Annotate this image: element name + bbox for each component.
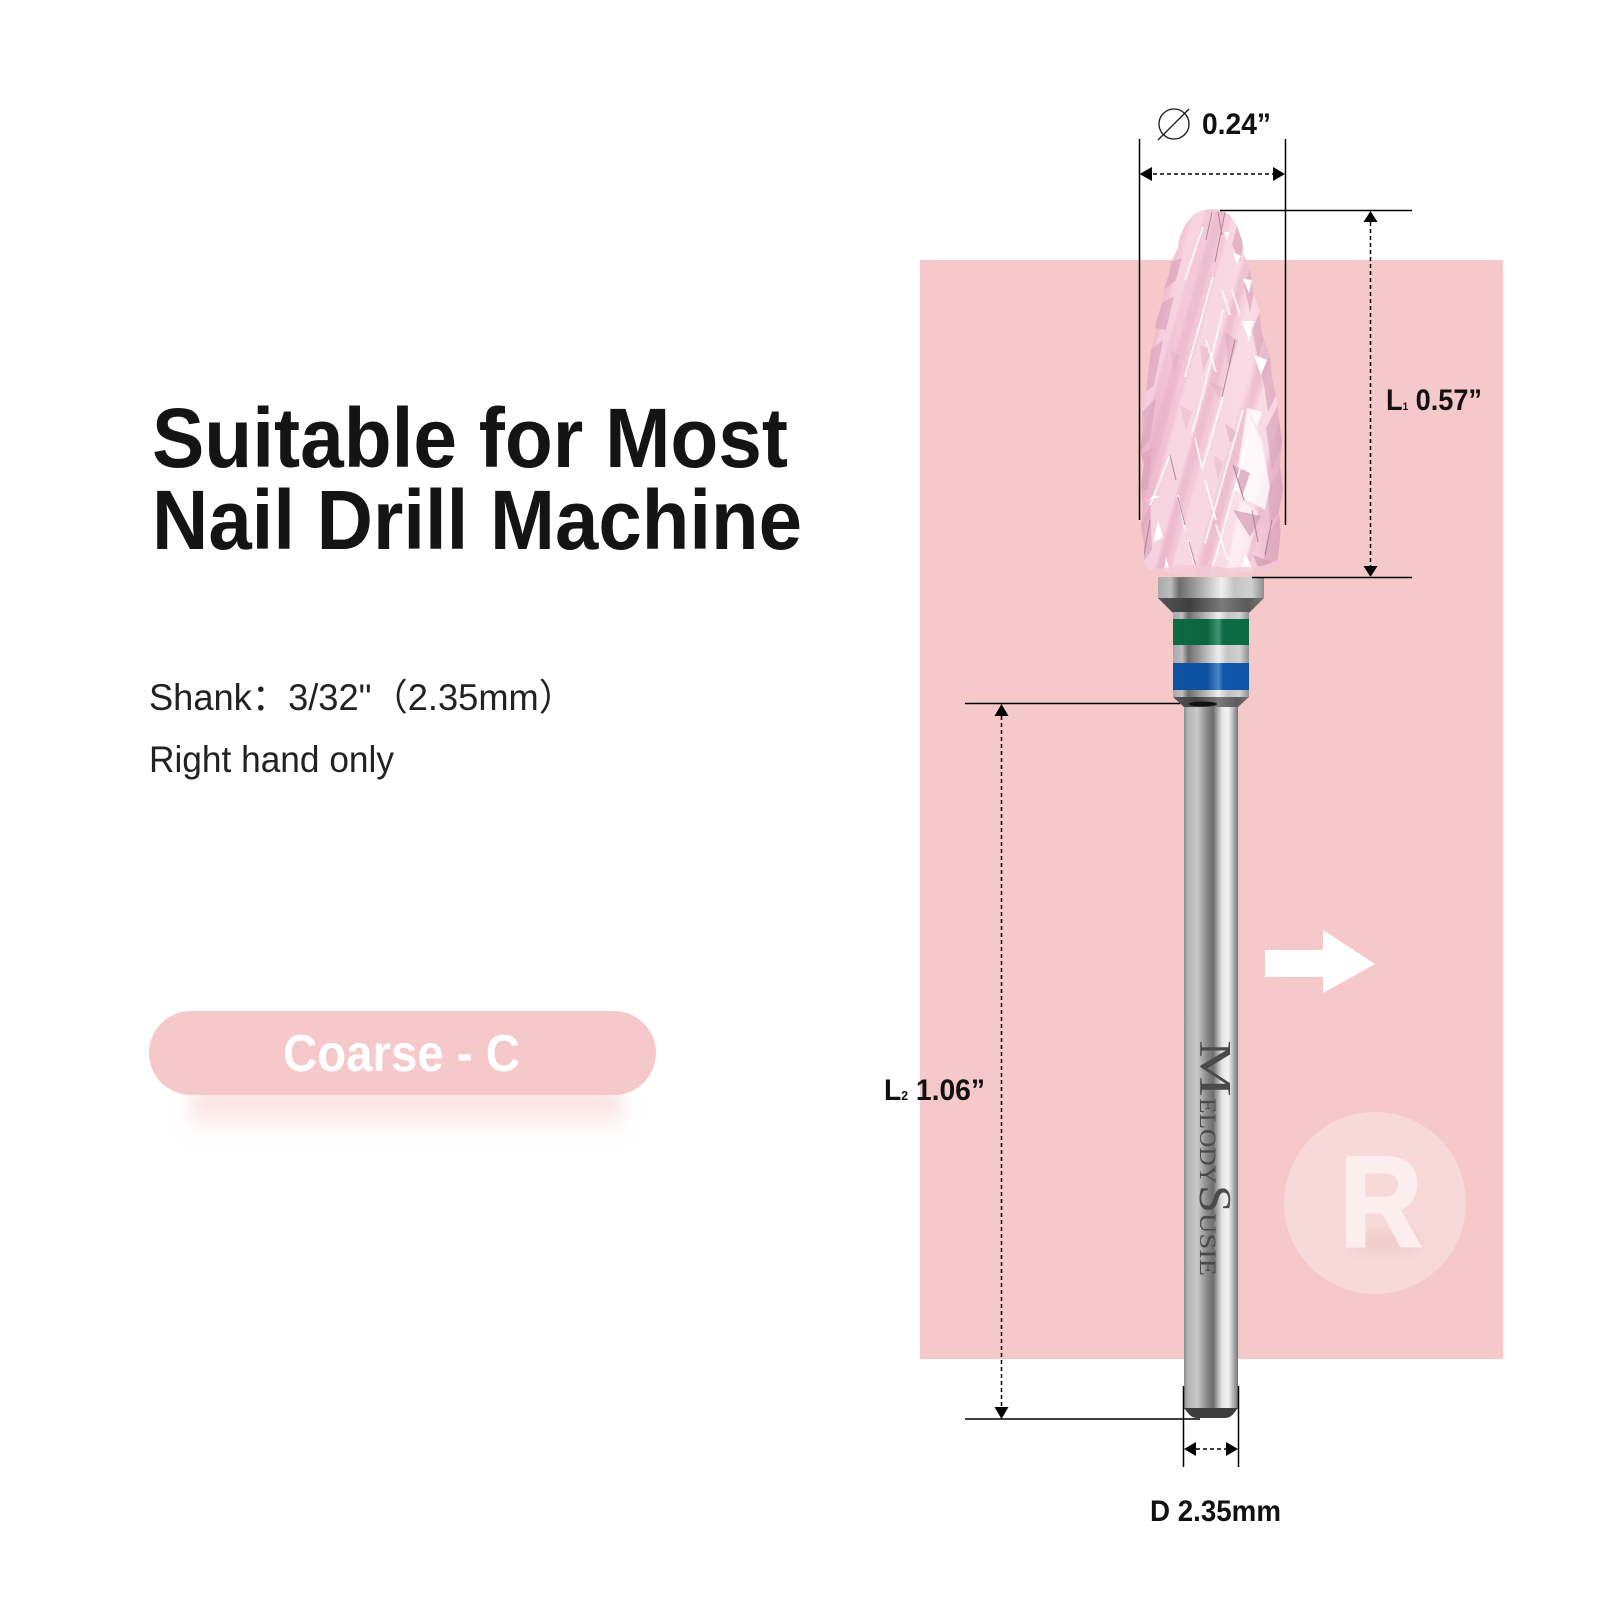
dimension: head length L1 0.57 inch: L1 0.57” [1386, 384, 1482, 417]
drill bit [1140, 209, 1283, 1418]
metal shank [1184, 707, 1238, 1409]
green ring [1173, 619, 1249, 645]
dimension: shank diameter D 2.35mm [1150, 1386, 1281, 1528]
engraved MelodySusie logo: S [1190, 1185, 1240, 1213]
dimension: head diameter 0.24 inch [1140, 108, 1286, 525]
shank tip [1184, 1408, 1238, 1418]
shaded facets [1170, 333, 1274, 567]
specification text [149, 677, 575, 780]
engraved MelodySusie logo: M [1190, 1040, 1240, 1097]
engraved MelodySusie logo [1190, 1040, 1240, 1276]
engraved MelodySusie logo: USIE [1195, 1213, 1220, 1276]
pink panel [920, 260, 1503, 1359]
lower collar [1173, 690, 1249, 707]
specification text: Shank：3/32"（2.35mm） [149, 677, 575, 718]
title: Nail Drill Machine [152, 473, 802, 567]
metal collar [1158, 577, 1264, 619]
dimension: head length L1 0.57 inch [1220, 210, 1482, 578]
title [152, 391, 802, 567]
right-hand R badge [1284, 1112, 1466, 1294]
dimension: shank length L2 1.06 inch: L2 1.06” [884, 1074, 985, 1107]
blue ring [1173, 663, 1249, 690]
icon: diameter symbol [1158, 109, 1189, 140]
dimension: shank diameter D 2.35mm: D 2.35mm [1150, 1495, 1281, 1528]
specification text: Right hand only [149, 739, 394, 780]
right-hand R badge: R [1340, 1131, 1422, 1274]
title: Suitable for Most [152, 391, 788, 485]
scalloped edge facets [1140, 226, 1284, 568]
white chip triangles [1146, 232, 1267, 572]
dark flute lines [1144, 212, 1272, 570]
ceramic pink bur head [1140, 209, 1283, 576]
coarse grade pill [149, 1011, 656, 1136]
silver spacer [1173, 645, 1249, 663]
engraved MelodySusie logo: ELODY [1195, 1098, 1220, 1184]
white flute lines [1150, 227, 1248, 570]
direction arrow [1265, 930, 1375, 993]
dimension: head diameter 0.24 inch: 0.24” [1202, 108, 1271, 141]
dimension: shank length L2 1.06 inch [884, 704, 1200, 1419]
coarse grade pill: Coarse - C [283, 1025, 520, 1083]
bright flute facet [1235, 407, 1270, 510]
